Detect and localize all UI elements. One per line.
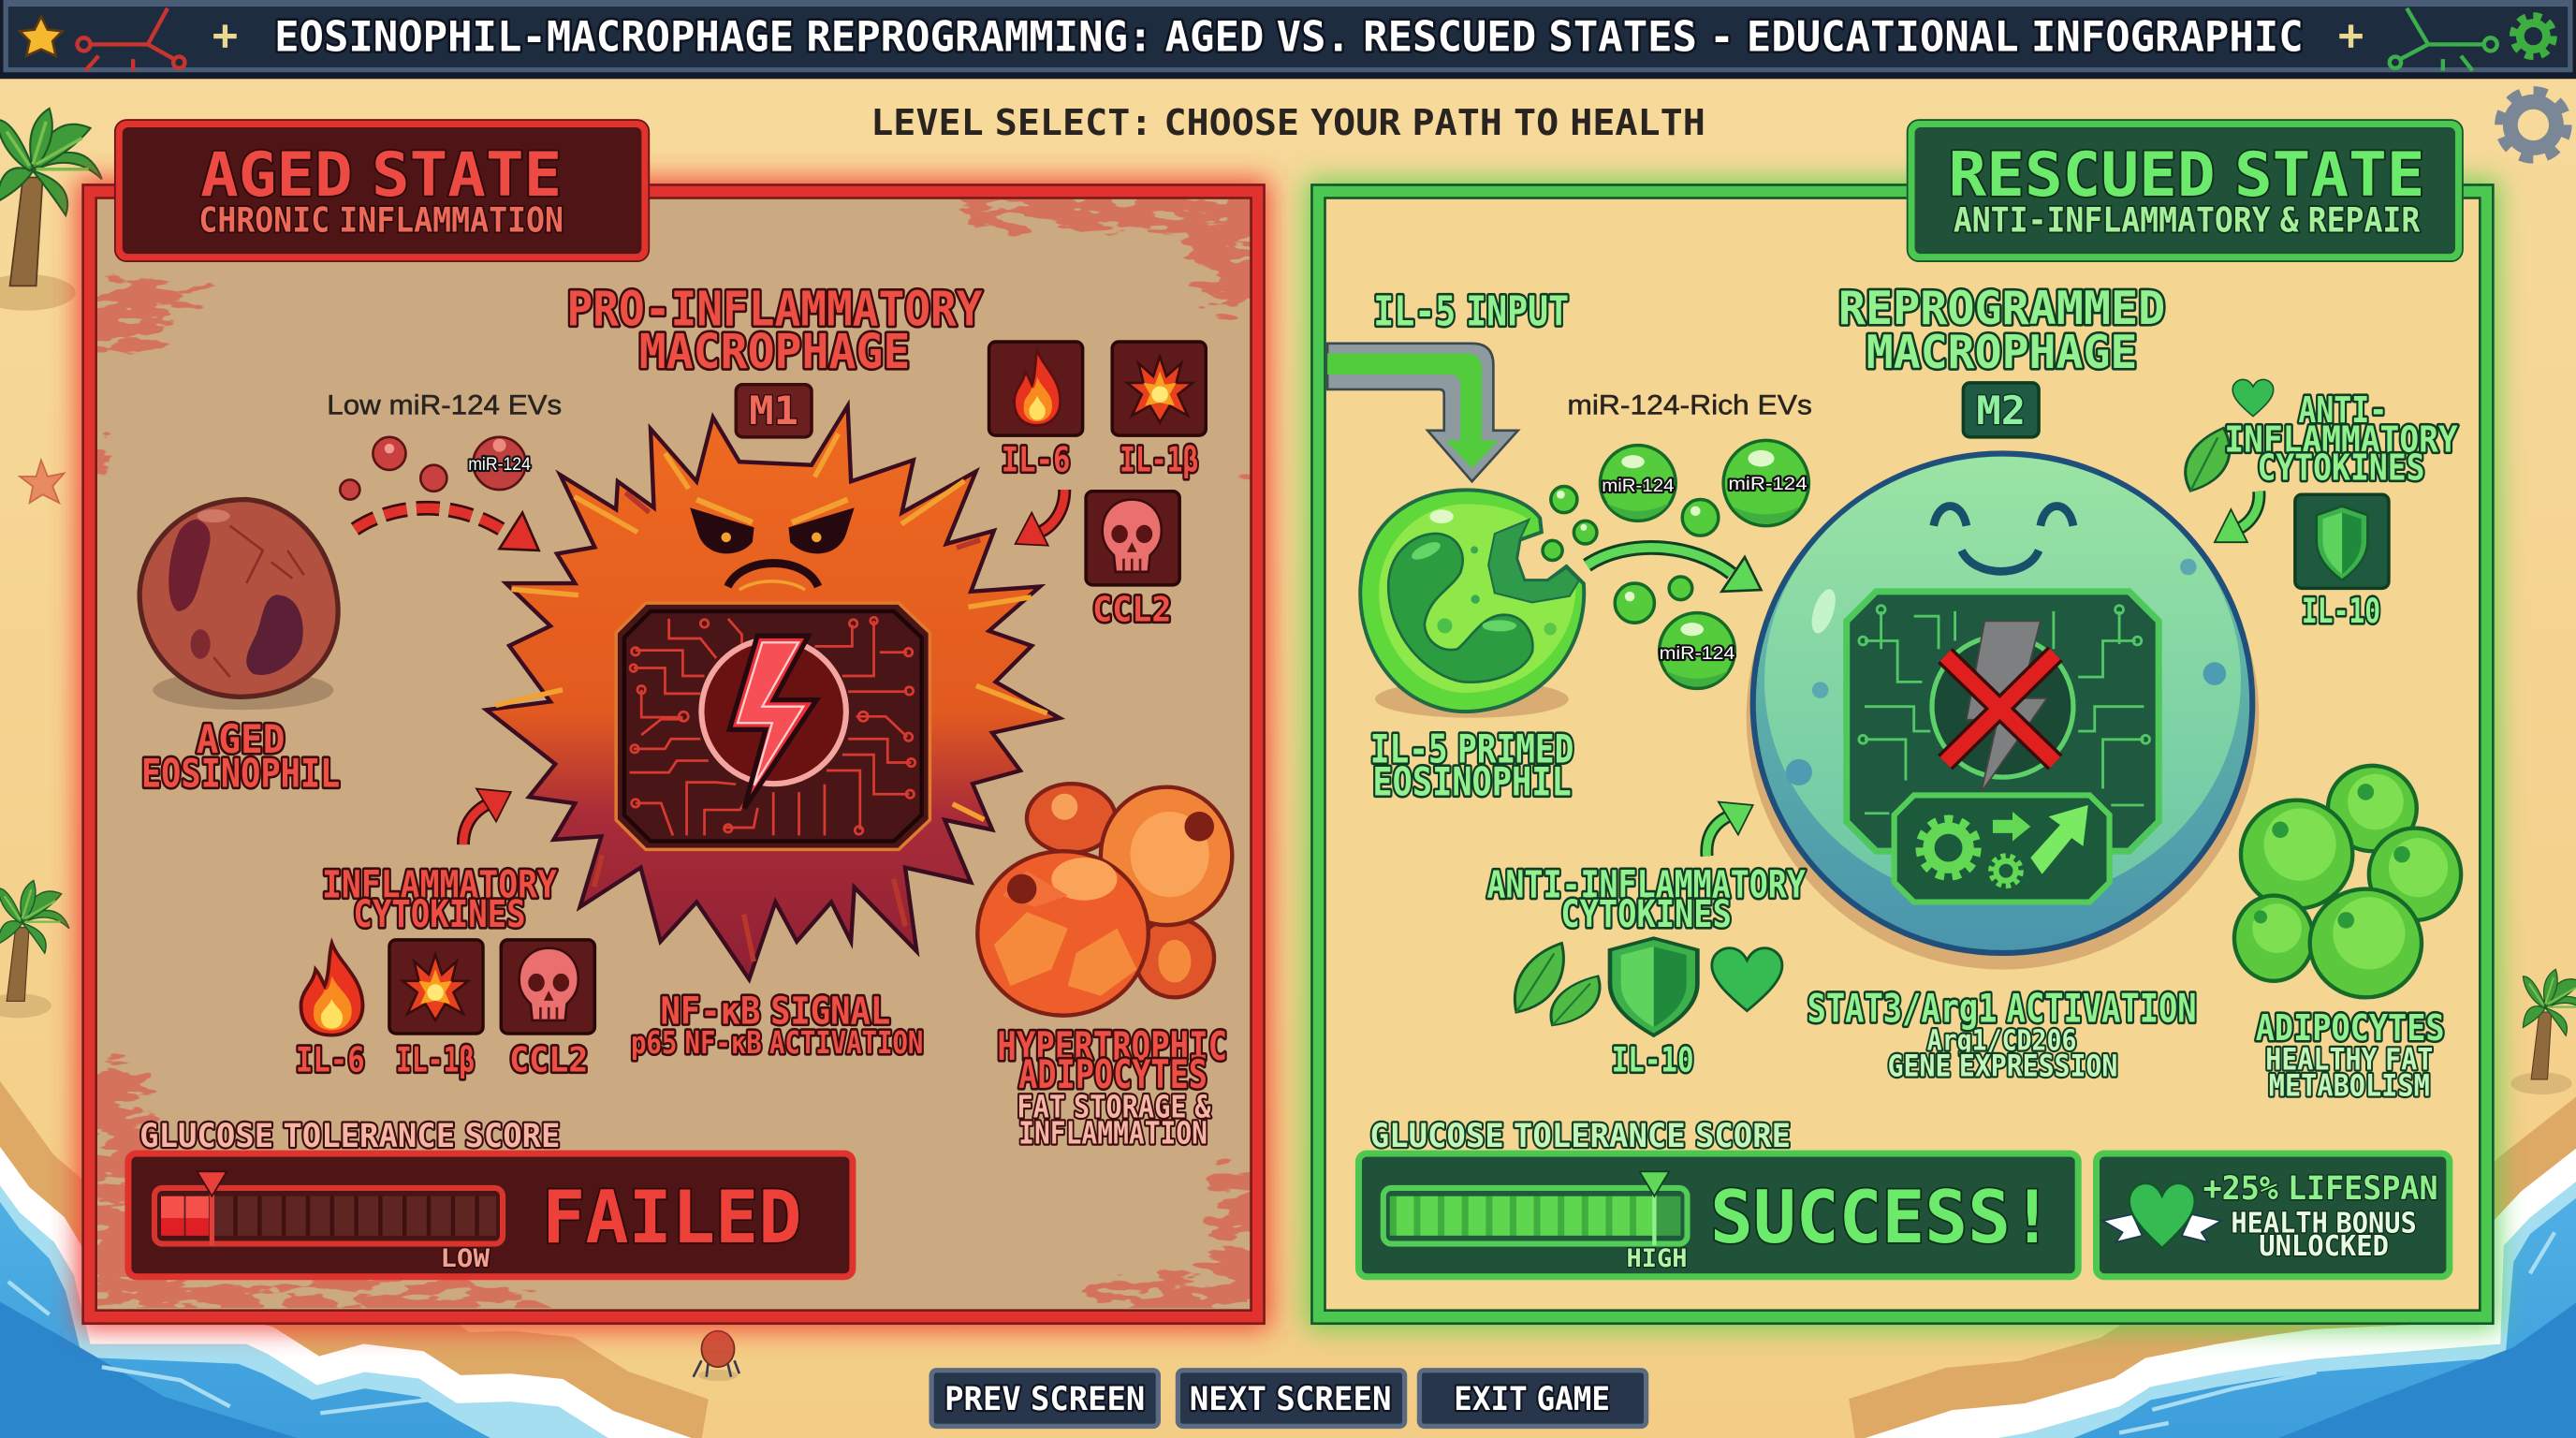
gene activation plate bbox=[1895, 795, 2110, 902]
icon: heart lower bbox=[1712, 948, 1782, 1011]
score bar: failed: FAILED bbox=[542, 1176, 801, 1260]
button: next screen bbox=[1178, 1371, 1405, 1426]
text: low miR-124 EVs: Low miR-124 EVs bbox=[327, 389, 562, 420]
icon: IL-10 shield lower bbox=[1610, 938, 1697, 1079]
heart icon above cytokines bbox=[2232, 379, 2274, 417]
palm tree: right bbox=[2510, 969, 2576, 1094]
icon: settings gear bbox=[2500, 92, 2566, 157]
button: exit game bbox=[1419, 1371, 1647, 1426]
hypertrophic adipocytes bbox=[977, 784, 1232, 1016]
icon: IL-10 shield lower: IL-10 bbox=[1612, 1039, 1694, 1079]
vesicles: miR-124 rich: miR-124 bbox=[1602, 477, 1675, 496]
arrow: IL-10 into macrophage bbox=[2215, 492, 2259, 542]
M2 badge bbox=[1963, 383, 2039, 437]
label: anti-inflammatory cytokines lower: ANTI-INFLAMMATORY bbox=[1486, 862, 1806, 906]
angry face bbox=[690, 500, 855, 590]
aged eosinophil cell bbox=[139, 500, 338, 710]
pipe arrow: IL-5 input bbox=[1327, 344, 1518, 481]
label: STAT3/Arg1 activation: Arg1/CD206 bbox=[1927, 1025, 2076, 1058]
button: prev screen: PREV SCREEN bbox=[944, 1380, 1145, 1418]
icon box: IL-1 beta top bbox=[1112, 342, 1206, 480]
label: NF-kB signal: NF-κB SIGNAL bbox=[661, 989, 890, 1033]
primed eosinophil cell bbox=[1360, 490, 1584, 718]
icon: left sparkle bbox=[213, 24, 237, 48]
label: IL-5 primed eosinophil: IL-5 PRIMED bbox=[1370, 726, 1573, 771]
label: IL-5 primed eosinophil: EOSINOPHIL bbox=[1372, 758, 1572, 804]
arrow: anti-inflammatory release bbox=[1706, 801, 1753, 856]
aged state header bbox=[115, 120, 649, 261]
label: hypertrophic adipocytes: FAT STORAGE & bbox=[1017, 1088, 1211, 1124]
leaf icon near cytokines bbox=[2175, 428, 2239, 492]
heading: reprogrammed macrophage: MACROPHAGE bbox=[1866, 325, 2137, 379]
label: inflammatory cytokines bbox=[322, 862, 558, 936]
heading: pro-inflammatory macrophage: MACROPHAGE bbox=[639, 325, 910, 380]
icon: right sparkle bbox=[2339, 24, 2363, 48]
level select heading: LEVEL SELECT: CHOOSE YOUR PATH TO HEALTH bbox=[871, 102, 1705, 144]
rescued state header: RESCUED STATE bbox=[1949, 140, 2425, 211]
palm tree: upper left bbox=[0, 109, 102, 311]
label: anti-inflammatory cytokines lower: CYTOKINES bbox=[1560, 892, 1732, 936]
text: miR-124-rich EVs: miR-124-Rich EVs bbox=[1567, 389, 1812, 420]
score bar: success bbox=[1358, 1153, 2078, 1277]
vesicles: miR-124 rich: miR-124 bbox=[1728, 475, 1808, 494]
spike highlights bbox=[495, 433, 1047, 961]
icon: crab bbox=[694, 1331, 739, 1381]
label: IL-5 input: IL-5 INPUT bbox=[1373, 288, 1569, 336]
icon: winged heart bbox=[2103, 1183, 2221, 1248]
icon box: IL-6 top: IL-6 bbox=[1002, 440, 1070, 480]
icon box: IL-1 beta lower bbox=[389, 940, 483, 1079]
smiling face bbox=[1934, 506, 2073, 571]
heading: pro-inflammatory macrophage: PRO-INFLAMMATORY bbox=[567, 283, 983, 338]
label: adipocytes healthy: ADIPOCYTES bbox=[2256, 1007, 2445, 1049]
M2 badge: M2 bbox=[1976, 388, 2026, 433]
icon: starfish bbox=[20, 460, 64, 503]
panel: rescued state bbox=[931, 120, 2499, 1426]
M1 badge bbox=[736, 385, 812, 437]
label: adipocytes healthy bbox=[2256, 1007, 2445, 1104]
M1 badge: M1 bbox=[749, 388, 798, 433]
icon box: CCL2 lower bbox=[501, 940, 594, 1079]
panel: aged state bbox=[74, 120, 1273, 1331]
bonus panel: lifespan: +25% LIFESPAN bbox=[2203, 1169, 2438, 1208]
glucose tolerance label: aged: GLUCOSE TOLERANCE SCORE bbox=[139, 1117, 560, 1155]
arrow: EV transfer rescued bbox=[1587, 548, 1761, 592]
icon: IL-6 flame bbox=[296, 943, 365, 1079]
icon box: CCL2 top bbox=[1086, 492, 1179, 629]
aged state header: CHRONIC INFLAMMATION bbox=[198, 199, 564, 240]
icon box: CCL2 lower: CCL2 bbox=[509, 1039, 588, 1079]
top title bar bbox=[0, 0, 2576, 79]
score bar: failed: LOW bbox=[440, 1245, 490, 1273]
icon box: CCL2 top: CCL2 bbox=[1092, 589, 1171, 629]
bonus panel: lifespan bbox=[2097, 1153, 2450, 1277]
glucose tolerance label: rescued: GLUCOSE TOLERANCE SCORE bbox=[1370, 1117, 1791, 1155]
icon box: IL-10 shield top bbox=[2295, 494, 2389, 631]
label: anti-inflammatory cytokines top: CYTOKINES bbox=[2258, 447, 2425, 489]
label: adipocytes healthy: METABOLISM bbox=[2269, 1070, 2430, 1104]
score bar: success: HIGH bbox=[1627, 1245, 1687, 1273]
label: STAT3/Arg1 activation bbox=[1808, 986, 2197, 1084]
macrophage M1: spiky cell bbox=[487, 385, 1060, 979]
label: anti-inflammatory cytokines top: INFLAMMATORY bbox=[2224, 419, 2458, 462]
aged state header: AGED STATE bbox=[200, 140, 562, 211]
ocean: lower left bbox=[0, 1151, 694, 1438]
bonus panel: lifespan: HEALTH BONUS bbox=[2231, 1207, 2417, 1240]
title: EOSINOPHIL-MACROPHAGE REPROGRAMMING: AGED VS. RESCUED STATES - EDUCATIONAL INFOGRAPHIC bbox=[274, 11, 2304, 61]
vesicles: miR-124 rich bbox=[1543, 440, 1808, 688]
ocean: lower right bbox=[1863, 1151, 2576, 1438]
icon box: IL-1 beta top: IL-1β bbox=[1120, 440, 1198, 480]
icon: red circuit bbox=[77, 8, 184, 70]
arrow: cytokines released bbox=[463, 788, 511, 844]
icons: leaves bbox=[1515, 943, 1600, 1025]
label: hypertrophic adipocytes: HYPERTROPHIC bbox=[997, 1023, 1227, 1069]
label: STAT3/Arg1 activation: STAT3/Arg1 ACTIVATION bbox=[1808, 986, 2197, 1032]
NF-kB chip bbox=[616, 603, 929, 849]
heading: pro-inflammatory macrophage bbox=[567, 283, 983, 380]
vesicles: low miR-124 bbox=[340, 437, 531, 500]
macrophage M2: smooth cell bbox=[1747, 453, 2259, 970]
icon box: IL-10 shield top: IL-10 bbox=[2302, 591, 2380, 631]
icon: star bbox=[20, 17, 63, 56]
label: aged eosinophil: EOSINOPHIL bbox=[141, 751, 340, 797]
icon: green gear bbox=[2513, 17, 2553, 56]
label: hypertrophic adipocytes bbox=[997, 1023, 1227, 1152]
label: IL-5 primed eosinophil bbox=[1370, 726, 1573, 804]
icon: IL-6 flame: IL-6 bbox=[296, 1039, 365, 1079]
rescued state header bbox=[1908, 120, 2463, 261]
button: next screen: NEXT SCREEN bbox=[1190, 1380, 1392, 1418]
button: prev screen bbox=[931, 1371, 1158, 1426]
label: NF-kB signal bbox=[631, 989, 923, 1061]
heading: reprogrammed macrophage bbox=[1838, 281, 2165, 379]
vesicles: miR-124 rich: miR-124 bbox=[1660, 644, 1735, 664]
label: STAT3/Arg1 activation: GENE EXPRESSION bbox=[1888, 1050, 2117, 1084]
label: inflammatory cytokines: CYTOKINES bbox=[353, 892, 526, 936]
icon: green circuit bbox=[2390, 8, 2497, 70]
score bar: success: SUCCESS! bbox=[1710, 1176, 2054, 1260]
label: anti-inflammatory cytokines lower bbox=[1486, 862, 1806, 936]
label: adipocytes healthy: HEALTHY FAT bbox=[2265, 1044, 2433, 1078]
button: exit game: EXIT GAME bbox=[1454, 1380, 1610, 1418]
heading: reprogrammed macrophage: REPROGRAMMED bbox=[1838, 281, 2165, 335]
icon box: IL-6 top bbox=[989, 342, 1083, 480]
bonus panel: lifespan: UNLOCKED bbox=[2259, 1230, 2389, 1263]
label: anti-inflammatory cytokines top bbox=[2224, 389, 2458, 489]
score bar: failed bbox=[128, 1153, 853, 1277]
label: inflammatory cytokines: INFLAMMATORY bbox=[322, 862, 558, 906]
label: hypertrophic adipocytes: INFLAMMATION bbox=[1018, 1115, 1208, 1152]
inhibited chip bbox=[1847, 592, 2159, 851]
vesicles: low miR-124: miR-124 bbox=[468, 455, 531, 475]
rescued state header: ANTI-INFLAMMATORY & REPAIR bbox=[1954, 199, 2421, 240]
label: aged eosinophil: AGED bbox=[197, 716, 285, 762]
arrow: dashed EV transfer bbox=[355, 508, 539, 550]
arrow: cytokines into macrophage bbox=[1016, 490, 1064, 546]
label: aged eosinophil bbox=[141, 716, 340, 797]
label: anti-inflammatory cytokines top: ANTI- bbox=[2298, 389, 2387, 432]
healthy adipocytes bbox=[2234, 766, 2461, 997]
icon box: IL-1 beta lower: IL-1β bbox=[396, 1039, 475, 1079]
label: hypertrophic adipocytes: ADIPOCYTES bbox=[1018, 1051, 1208, 1097]
label: NF-kB signal: p65 NF-κB ACTIVATION bbox=[631, 1024, 923, 1061]
palm tree: middle left bbox=[0, 881, 69, 1018]
